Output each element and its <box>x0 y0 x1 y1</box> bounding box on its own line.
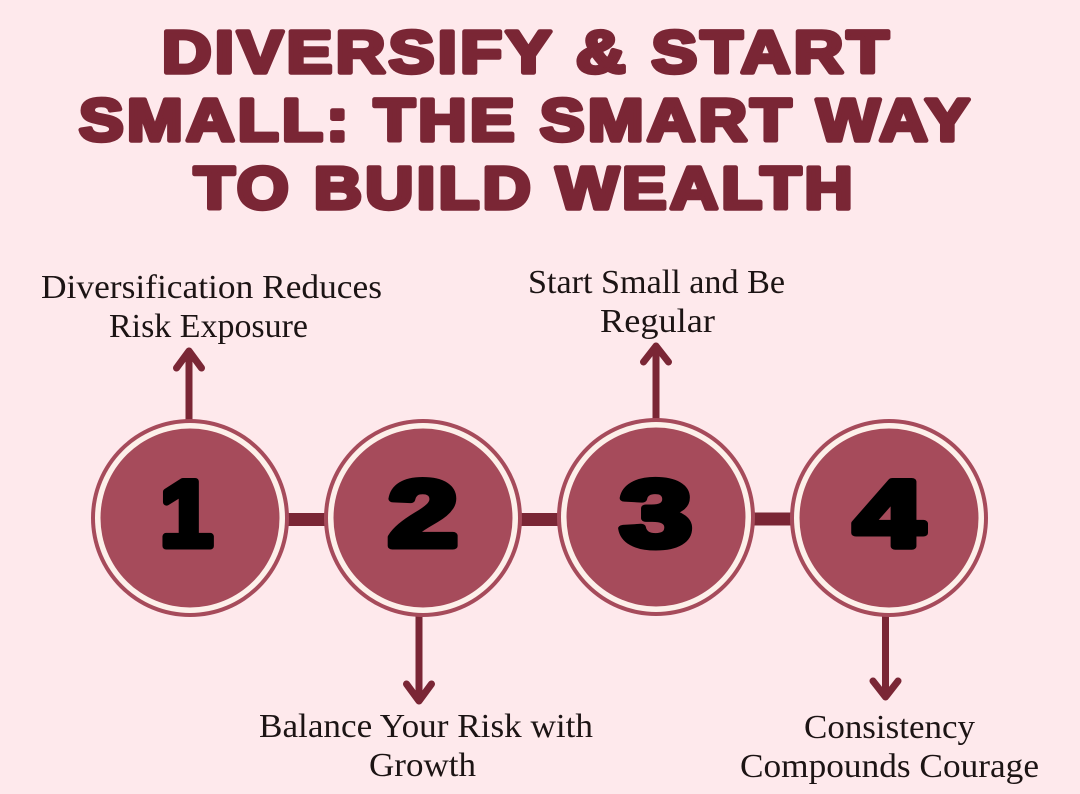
label: step 2 <box>259 708 593 784</box>
arrow: step 2 down <box>406 616 432 701</box>
title <box>79 20 973 222</box>
connector: 1 to 2 <box>287 513 327 526</box>
label: step 3 <box>528 264 785 340</box>
title: TO BUILD WEALTH <box>194 156 856 222</box>
label: step 4 <box>740 709 1039 785</box>
step 1 circle <box>91 419 289 617</box>
step 4 circle: 4 <box>854 461 924 566</box>
step 3 circle <box>557 418 755 616</box>
title: DIVERSIFY & START <box>162 20 892 86</box>
step 3 circle: 3 <box>620 461 692 566</box>
step 2 circle: 2 <box>388 461 458 566</box>
label: step 3: Start Small and Be <box>528 264 785 301</box>
label: step 4: Compounds Courage <box>740 748 1039 785</box>
step 1 circle: 1 <box>160 461 213 566</box>
arrow: step 4 down <box>873 616 898 697</box>
label: step 1 <box>41 269 382 345</box>
label: step 1: Risk Exposure <box>109 308 308 345</box>
title: SMALL: THE SMART WAY <box>79 88 973 154</box>
step 2 circle <box>324 419 522 617</box>
connector: 2 to 3 <box>520 513 560 526</box>
connector: 3 to 4 <box>752 512 792 526</box>
arrow: step 3 up <box>644 346 668 420</box>
step 4 circle <box>790 419 988 617</box>
label: step 1: Diversification Reduces <box>41 269 382 306</box>
label: step 4: Consistency <box>804 709 975 746</box>
arrow: step 1 up <box>176 351 202 420</box>
label: step 2: Growth <box>369 747 476 784</box>
label: step 3: Regular <box>600 303 716 340</box>
label: step 2: Balance Your Risk with <box>259 708 593 745</box>
